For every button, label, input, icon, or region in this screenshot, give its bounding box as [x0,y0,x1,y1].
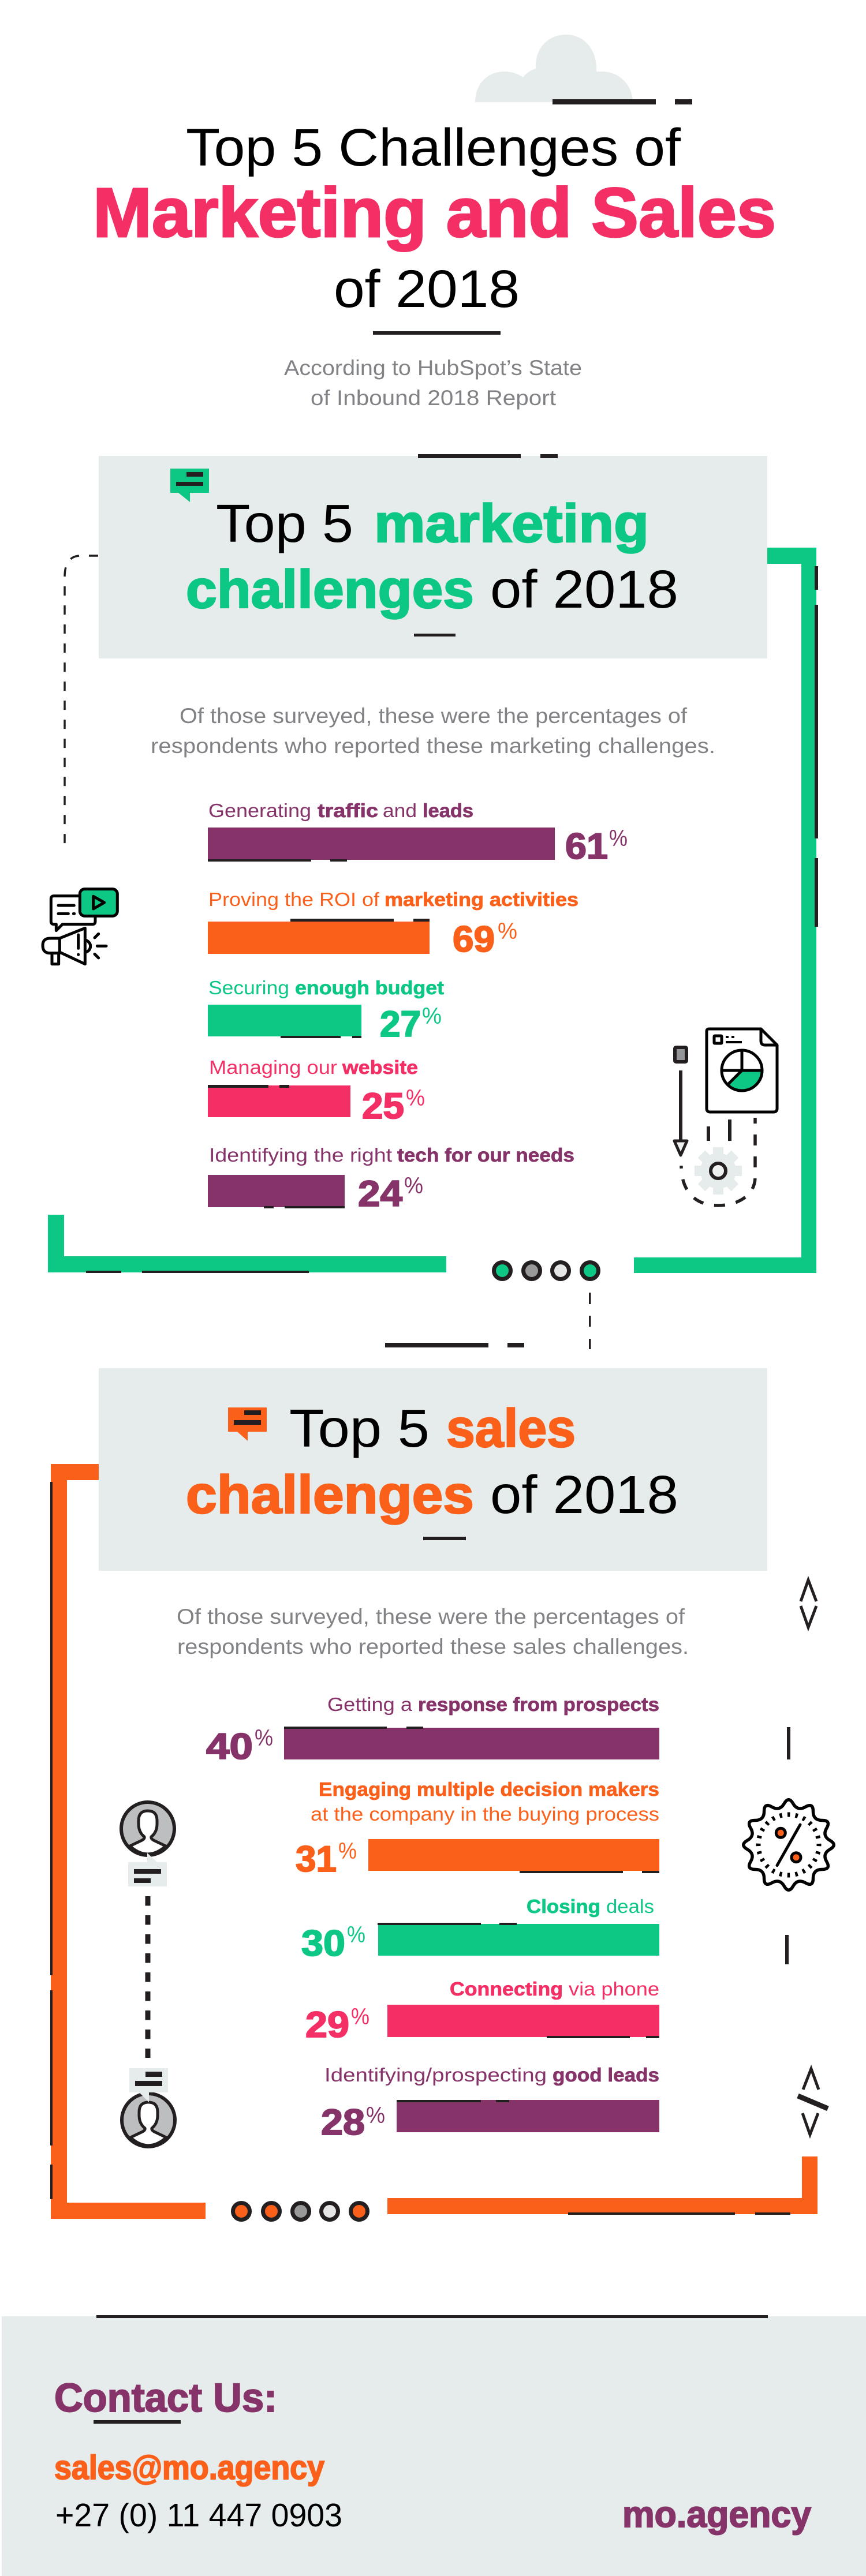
marketing heading box: marketing [374,493,649,553]
marketing intro text: respondents who reported these marketing challenges. [151,734,715,758]
bar: website 25%: website [342,1057,418,1078]
bar: tech for our needs 24%: tech for our needs [397,1144,574,1166]
bar: ROI of marketing activities 69%: marketing activities [385,889,578,910]
bar: multiple decision makers 31%: Engaging multiple decision makers [319,1779,659,1800]
bar: tech for our needs 24%: % [404,1173,423,1199]
bar: response from prospects 40%: % [255,1725,273,1751]
bar: closing deals 30%: % [347,1922,365,1948]
sales heading box: Top 5 [289,1398,430,1458]
bar: multiple decision makers 31% [296,1779,659,1879]
bar: closing deals 30%: 30 [301,1923,345,1964]
sales pagination dots [233,2203,367,2219]
marketing pagination dots [494,1263,598,1279]
sales intro text [177,1605,689,1658]
bar: website 25% [208,1057,425,1126]
icon: green speech bubble [170,469,209,502]
sales heading box: sales [446,1398,576,1458]
bar: ROI of marketing activities 69% [208,889,578,960]
bar: traffic and leads 61%: leads [423,800,473,821]
icon: cloud [475,35,692,104]
bar: ROI of marketing activities 69%: 69 [453,919,495,960]
bar: traffic and leads 61% [208,800,628,867]
bar: tech for our needs 24% [208,1144,574,1214]
dashed connector [589,1293,591,1349]
icon: code brackets [798,2069,828,2135]
bar: website 25%: % [406,1085,425,1111]
panel: sales challenges [50,1343,834,2219]
bar: traffic and leads 61%: traffic [318,800,378,821]
bar: enough budget 27%: % [422,1004,442,1029]
title [93,118,776,335]
sales heading box: of 2018 [490,1465,678,1525]
bar: good leads 28%: 28 [321,2102,365,2143]
icon: conversation between two people [121,1802,175,2147]
bar: traffic and leads 61%: % [609,826,628,851]
icon: orange speech bubble [228,1407,267,1441]
sales heading box [99,1343,767,1571]
phone: +27 (0) 11 447 0903 [55,2497,342,2534]
bar: connecting via phone 29% [305,1978,659,2045]
bar: tech for our needs 24%: Identifying the right [209,1144,392,1166]
bar: multiple decision makers 31%: % [338,1839,357,1864]
vertical divider dashes [785,1727,790,1964]
bar: ROI of marketing activities 69%: Proving the ROI of [208,889,380,910]
orange frame [50,1464,818,2219]
icon: arrow and gear flow [674,1047,755,1205]
bar: traffic and leads 61%: 61 [565,826,608,867]
marketing intro text: Of those surveyed, these were the percentages of [180,704,688,728]
bar: closing deals 30% [301,1896,659,1964]
bar: connecting via phone 29%: Connecting [450,1978,563,2000]
bar: response from prospects 40%: 40 [206,1727,253,1767]
sales intro text: respondents who reported these sales challenges. [177,1635,689,1658]
marketing intro text [151,704,715,758]
bar: enough budget 27%: 27 [380,1004,421,1044]
contact heading: Contact Us: [54,2375,277,2420]
bar: multiple decision makers 31%: at the company in the buying process [311,1803,659,1825]
bar: enough budget 27% [208,977,444,1044]
bar: enough budget 27%: Securing [208,977,289,998]
bar: connecting via phone 29%: 29 [305,2005,349,2045]
icon: megaphone and speech bubbles [43,889,117,964]
bar: traffic and leads 61%: Generating [208,800,311,821]
bar: response from prospects 40%: Getting a [327,1694,413,1715]
marketing heading box: Top 5 [216,493,353,553]
bar: connecting via phone 29%: % [351,2004,369,2030]
title: of 2018 [334,260,520,319]
bar: tech for our needs 24%: 24 [358,1174,402,1214]
subtitle: of Inbound 2018 Report [311,386,557,410]
bar: good leads 28%: Identifying/prospecting [324,2064,547,2085]
bar: good leads 28% [321,2064,659,2143]
marketing heading box: of 2018 [490,559,678,619]
bar: multiple decision makers 31%: 31 [296,1839,337,1879]
sales heading box: challenges [186,1465,474,1525]
panel: marketing challenges [43,454,818,1349]
bar: enough budget 27%: enough budget [295,977,444,998]
subtitle [284,356,582,410]
title: Top 5 Challenges of [186,118,681,177]
icon: up and down chevrons [801,1580,816,1627]
bar: response from prospects 40%: response from prospects [418,1694,659,1715]
bar: closing deals 30%: deals [606,1896,654,1917]
title: Marketing and Sales [93,173,776,252]
bar: connecting via phone 29%: via phone [569,1978,659,2000]
panel: contact footer [2,2315,866,2576]
bar: closing deals 30%: Closing [527,1896,600,1917]
website: mo.agency [622,2493,811,2535]
bar: good leads 28%: good leads [553,2064,659,2085]
icon: percent badge [744,1800,834,1890]
sales intro text: Of those surveyed, these were the percentages of [177,1605,685,1628]
marketing heading box [99,454,767,658]
bar: website 25%: Managing our [209,1057,337,1078]
email: sales@mo.agency [54,2449,324,2487]
bar: good leads 28%: % [366,2103,385,2128]
subtitle: According to HubSpot’s State [284,356,582,380]
bar: response from prospects 40% [206,1694,659,1767]
bar: ROI of marketing activities 69%: % [498,919,517,944]
bar: website 25%: 25 [362,1086,404,1126]
marketing heading box: challenges [186,559,474,619]
icon: report document with pie chart [707,1029,777,1112]
bar: traffic and leads 61%: and [383,800,417,821]
green frame [48,548,818,1273]
